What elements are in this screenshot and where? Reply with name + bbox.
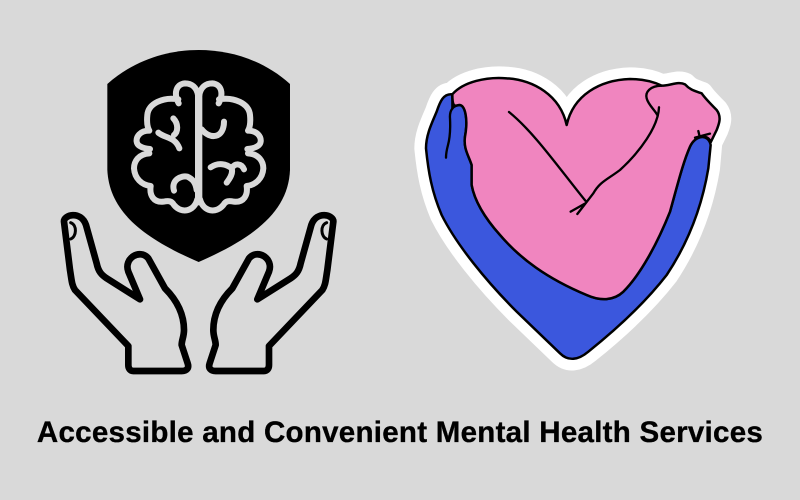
white sticker border	[426, 78, 720, 359]
icon: brain	[134, 83, 263, 210]
title: Accessible and Convenient Mental Health Services	[37, 416, 763, 449]
icon: right hand	[209, 215, 333, 371]
icon: left hand	[64, 215, 188, 371]
icon: hugging heart sticker	[426, 78, 720, 359]
blue embracing arm	[426, 94, 711, 359]
icon: shield with brain and hands	[64, 50, 333, 371]
line details: arm creases and fingers	[446, 86, 710, 214]
pink body	[452, 78, 720, 299]
icon: black shield	[107, 50, 290, 262]
